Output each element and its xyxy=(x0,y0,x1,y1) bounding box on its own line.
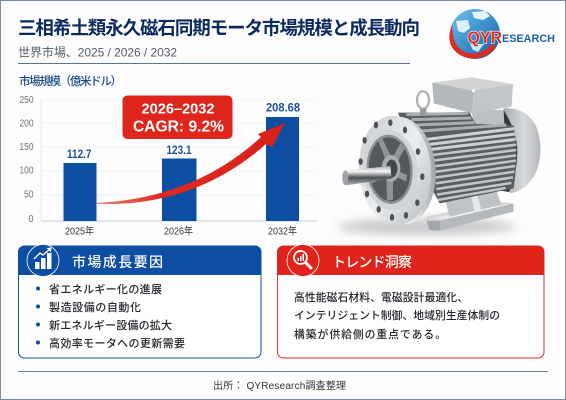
bar chart: 2026年 xyxy=(164,224,193,238)
bar chart: 250 xyxy=(20,95,34,106)
bar chart: 50 xyxy=(24,190,34,200)
panel header: trends xyxy=(277,246,544,275)
panel heading: drivers: 市場成長要因 xyxy=(72,254,163,270)
illustration: electric motor xyxy=(336,77,540,235)
list: drivers: 高効率モータへの更新需要 xyxy=(49,336,185,350)
text block: trends: 構築が供給側の重点である。 xyxy=(294,327,446,341)
bar chart: 0 xyxy=(28,214,34,225)
bar chart: 2025年 xyxy=(65,224,94,238)
bar chart: 100 xyxy=(20,166,34,176)
logo: QYResearch: QYR xyxy=(468,28,502,47)
source note: 出所： QYResearch調査整理 xyxy=(213,379,346,392)
arrow: growth curve xyxy=(97,123,285,204)
list: drivers: 製造設備の自動化 xyxy=(49,300,141,314)
bar chart: 200 xyxy=(20,118,34,130)
icon: growth chart xyxy=(27,244,59,276)
list: drivers: 新エネルギー設備の拡大 xyxy=(49,318,172,332)
bar chart: 123.1 xyxy=(166,143,192,157)
bar: 2026 xyxy=(162,158,196,221)
text block: trends: インテリジェント制御、地域別生産体制の xyxy=(294,308,500,322)
chart heading: 市場規模（億米ドル） xyxy=(19,74,122,88)
list: drivers xyxy=(36,282,185,350)
text block: trends xyxy=(294,290,500,341)
bar: 2032 xyxy=(266,117,299,221)
icon: magnifier xyxy=(287,244,319,276)
panel header: drivers xyxy=(18,246,261,275)
bar: 2025 xyxy=(64,163,96,221)
text block: trends: 高性能磁石材料、電磁設計最適化、 xyxy=(294,290,468,304)
bar chart: 2032年 xyxy=(268,224,297,238)
list: drivers: 省エネルギー化の進展 xyxy=(49,282,162,296)
panel: trend insights xyxy=(277,244,544,358)
subtitle: 世界市場、2025 / 2026 / 2032 xyxy=(18,46,177,60)
title: 三相希土類永久磁石同期モータ市場規模と成長動向 xyxy=(18,18,420,38)
callout: CAGR xyxy=(122,96,232,139)
logo: QYResearch: ESEARCH xyxy=(502,33,555,45)
panel: market growth drivers xyxy=(18,244,261,358)
bar chart: 208.68 xyxy=(266,100,300,114)
bar chart xyxy=(20,95,317,238)
panel heading: trends: トレンド洞察 xyxy=(332,254,412,270)
bar chart: 150 xyxy=(20,142,34,153)
callout: CAGR: 2026–2032 xyxy=(142,100,214,118)
callout: CAGR: CAGR: 9.2% xyxy=(133,118,224,136)
logo: QYResearch xyxy=(449,9,555,59)
bar chart: 112.7 xyxy=(67,147,92,161)
